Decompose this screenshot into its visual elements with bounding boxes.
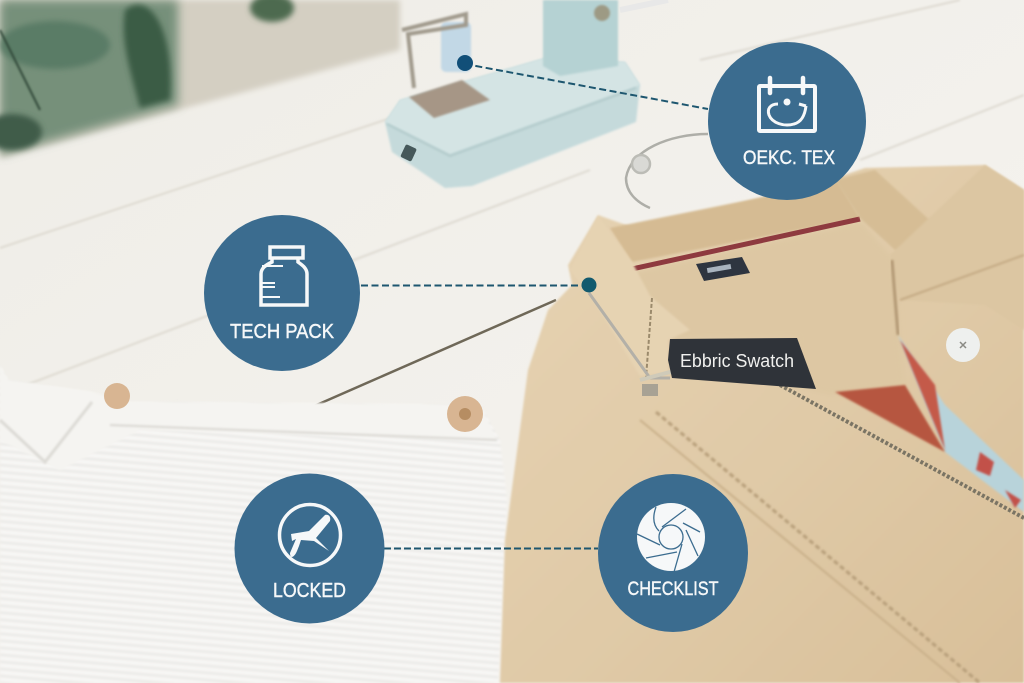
label: OEKC. TEX: OEKC. TEX	[743, 148, 835, 169]
beige jacket	[500, 165, 1024, 683]
icon: smiling calendar	[759, 78, 815, 131]
connector: jacket collar to Tech Pack	[361, 278, 596, 292]
icon: jar	[261, 247, 307, 305]
icon: circled plane shape	[280, 504, 340, 566]
icon: camera aperture	[637, 503, 705, 572]
sewing machine	[385, 0, 668, 188]
label: LOCKED: LOCKED	[273, 580, 346, 602]
fabric swatch label: Ebbric Swatch	[680, 351, 794, 371]
label: TECH PACK: TECH PACK	[230, 321, 335, 343]
metal ring on table	[626, 134, 708, 208]
connector: sewing machine to OEKO-TEX	[457, 55, 708, 109]
jacket neck interior	[632, 222, 905, 395]
jacket right collar flap	[835, 170, 935, 256]
badge: Locked	[234, 474, 384, 624]
jacket collar band	[610, 182, 860, 262]
jacket left collar	[570, 216, 690, 376]
badge: OEKO-TEX	[708, 42, 866, 200]
badge: Tech Pack	[204, 215, 360, 371]
fabric swatch label	[668, 338, 816, 389]
background: plant and wall	[0, 0, 400, 158]
white striped shirt	[0, 365, 507, 683]
badge: Checklist	[598, 474, 748, 632]
floral lining	[898, 335, 1024, 512]
connector: Locked to Checklist	[384, 548, 598, 550]
label: CHECKLIST: CHECKLIST	[628, 579, 719, 600]
